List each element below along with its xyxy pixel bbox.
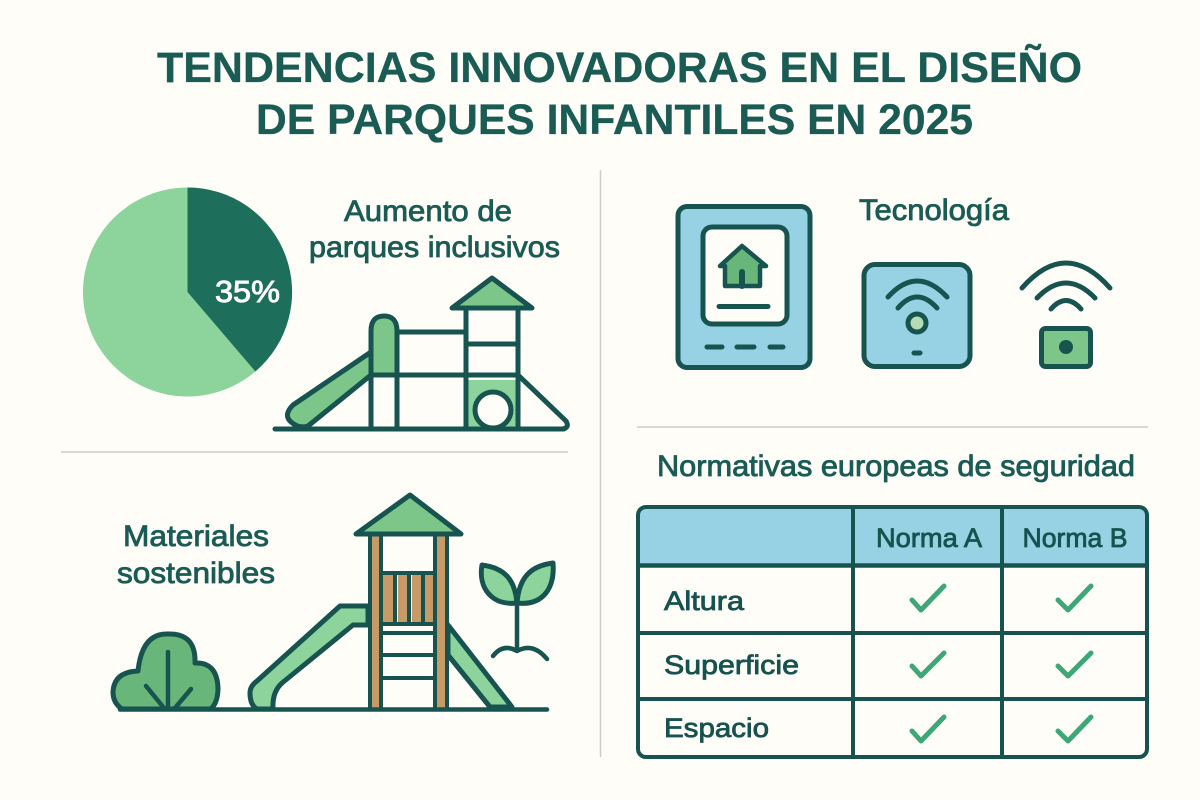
heading: materiales sostenibles: Materiales <box>123 520 269 553</box>
heading: aumento de parques inclusivos: parques inclusivos <box>309 231 560 264</box>
table row labels <box>664 586 799 743</box>
heading: tecnología: Tecnología <box>859 194 1009 227</box>
heading: materiales sostenibles: sostenibles <box>117 557 275 590</box>
heading: aumento de parques inclusivos: Aumento de <box>344 195 512 228</box>
icon: bush <box>113 634 218 709</box>
table <box>638 507 1147 757</box>
title <box>157 44 1082 144</box>
panel: tecnología <box>678 194 1110 368</box>
heading: normativas: Normativas europeas de seguridad <box>657 450 1135 483</box>
title: TENDENCIAS INNOVADORAS EN EL DISEÑO <box>157 44 1082 92</box>
pie chart: 35% <box>83 187 292 396</box>
icon: wifi panel <box>864 264 970 366</box>
panel: parques inclusivos <box>83 187 567 429</box>
table header labels <box>876 523 1128 553</box>
pie chart: 35%: 35% <box>215 274 280 309</box>
title: DE PARQUES INFANTILES EN 2025 <box>256 96 973 144</box>
table row labels: Espacio <box>664 713 769 743</box>
table header labels: Norma B <box>1022 523 1128 553</box>
panel: normativas europeas de seguridad <box>638 450 1147 757</box>
table row labels: Altura <box>664 586 745 616</box>
table header labels: Norma A <box>876 523 982 553</box>
panel: materiales sostenibles <box>113 495 553 710</box>
icon: wifi sensor <box>1022 263 1110 366</box>
illustration: wooden playground with slide <box>120 495 547 710</box>
heading: materiales sostenibles <box>117 520 275 590</box>
icon: sprout <box>481 563 553 659</box>
table check marks <box>912 586 1091 741</box>
heading: aumento de parques inclusivos <box>309 195 560 264</box>
illustration: inclusive playground <box>275 278 567 429</box>
icon: tablet with home <box>678 206 810 368</box>
table row labels: Superficie <box>664 650 799 680</box>
